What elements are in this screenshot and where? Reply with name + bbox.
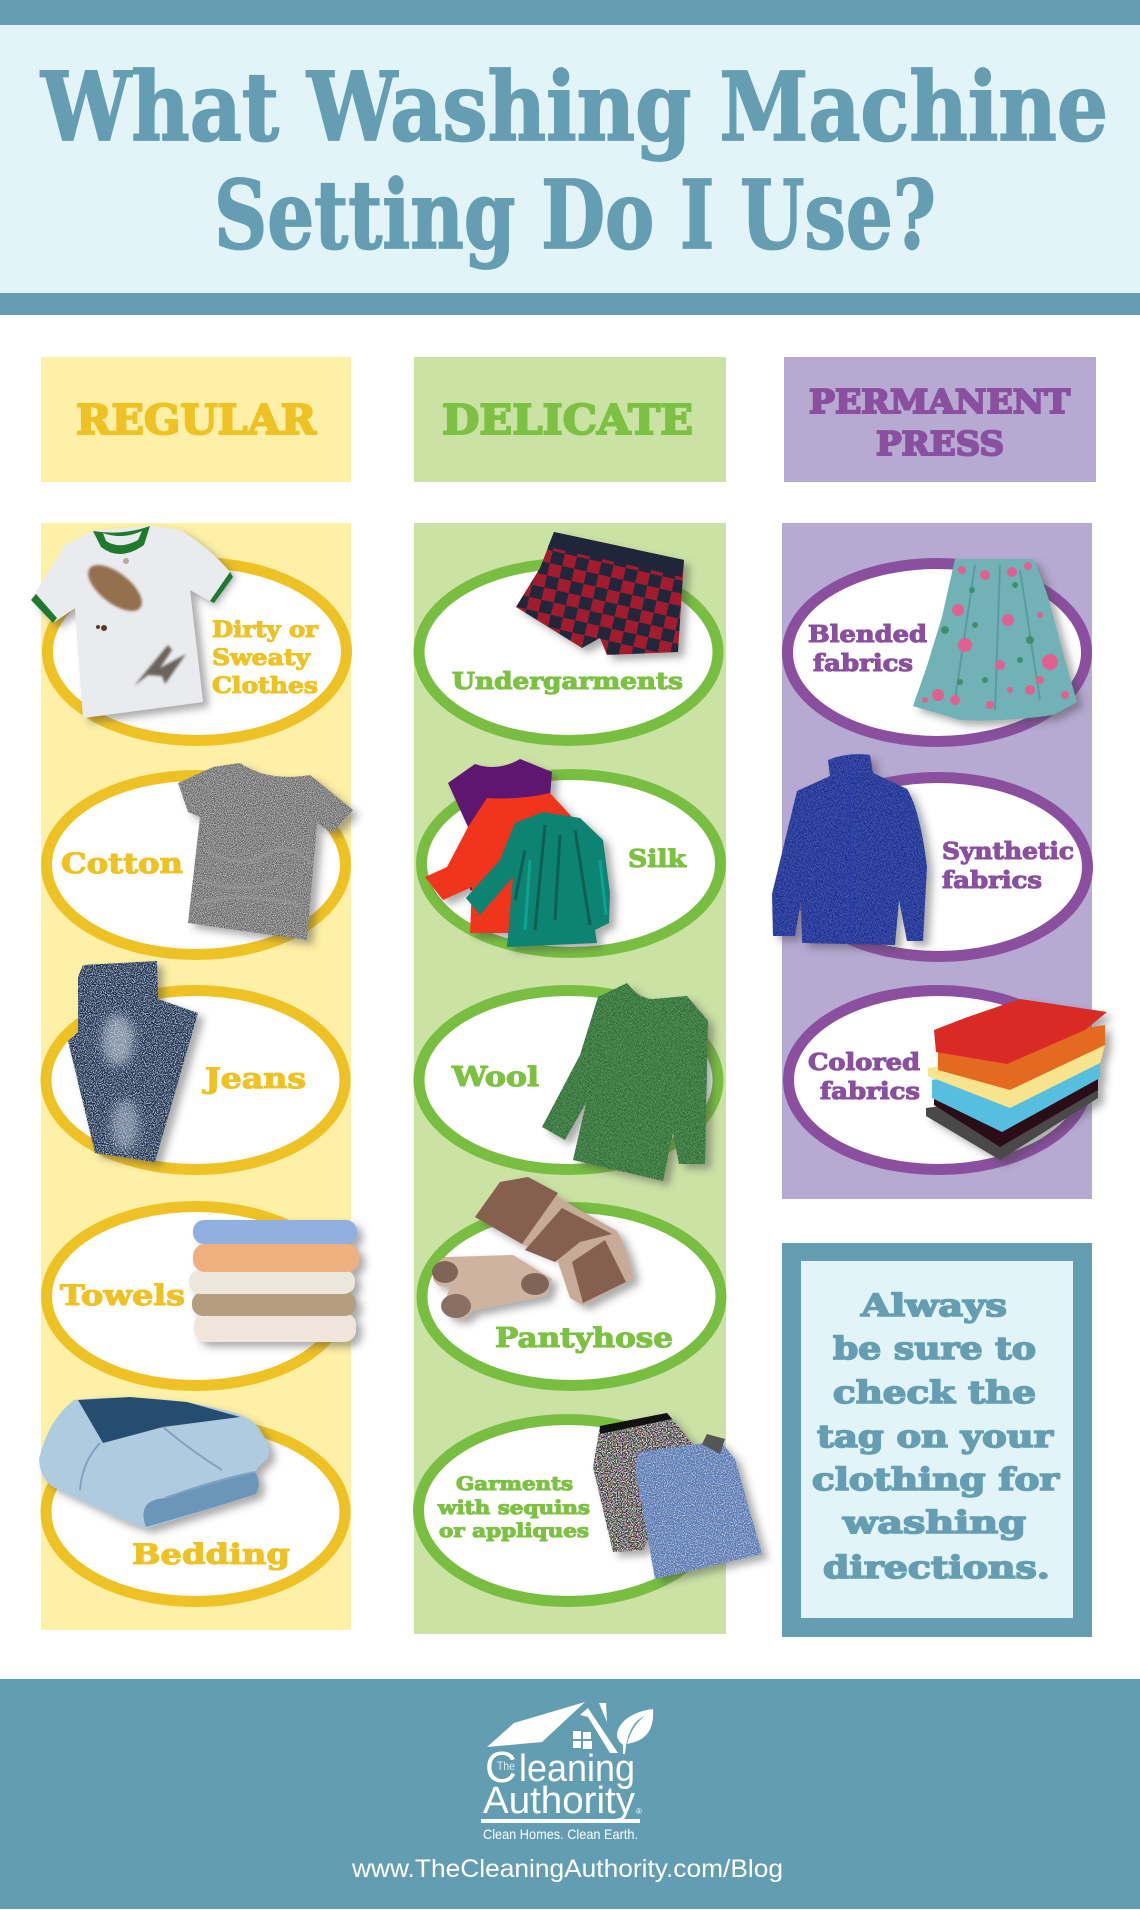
label: fabrics xyxy=(942,867,1042,894)
label: fabrics xyxy=(813,650,913,677)
label: Towels xyxy=(60,1279,185,1312)
icon: pantyhose xyxy=(432,1177,633,1319)
website url: www.TheCleaningAuthority.com/Blog xyxy=(351,1855,783,1883)
item: synthetic fabrics xyxy=(772,754,1088,956)
label: Synthetic xyxy=(942,838,1074,865)
logo: the cleaning authority xyxy=(481,1702,653,1842)
heading: permanent press xyxy=(784,357,1096,482)
heading: regular: REGULAR xyxy=(76,396,317,444)
icon: house and leaf xyxy=(487,1702,653,1754)
heading: permanent press: PERMANENT xyxy=(809,382,1070,421)
header banner xyxy=(0,0,1140,315)
item: wool xyxy=(419,983,718,1181)
label: Clothes xyxy=(212,673,318,699)
item: towels xyxy=(46,1206,359,1386)
item: blended fabrics xyxy=(788,559,1086,742)
label: Bedding xyxy=(132,1538,290,1571)
logo: the cleaning authority: The xyxy=(497,1759,515,1773)
label: Sweaty xyxy=(212,645,311,671)
label: or appliques xyxy=(439,1520,589,1542)
item: silk xyxy=(422,759,720,952)
label: Garments xyxy=(456,1473,573,1495)
title: Setting Do I Use? xyxy=(214,160,936,271)
icon: folded colored stack xyxy=(926,999,1107,1160)
icon: blue fleece jacket xyxy=(772,754,927,945)
heading: permanent press: PRESS xyxy=(876,424,1004,463)
item: pantyhose xyxy=(422,1177,721,1386)
panel: regular items xyxy=(31,523,359,1630)
label xyxy=(808,1049,920,1105)
logo: the cleaning authority: Clean Homes. Clean Earth. xyxy=(483,1826,638,1842)
icon: green sweater xyxy=(542,983,708,1181)
item: cotton xyxy=(46,763,353,954)
heading: delicate xyxy=(414,357,726,482)
icon: gray t-shirt xyxy=(178,763,353,940)
heading: delicate: DELICATE xyxy=(442,396,693,444)
logo: the cleaning authority: leaning xyxy=(519,1748,635,1790)
callout text: tag on your xyxy=(817,1419,1054,1455)
item: dirty or sweaty clothes xyxy=(31,526,346,740)
label xyxy=(212,617,318,699)
label: Undergarments xyxy=(452,668,683,695)
callout text: check the xyxy=(833,1375,1036,1411)
item: garments with sequins or appliques xyxy=(418,1413,762,1602)
callout: check the tag xyxy=(782,1243,1092,1637)
panel: delicate items xyxy=(414,523,762,1634)
label: Blended xyxy=(808,621,927,648)
logo: the cleaning authority: Authority xyxy=(483,1780,635,1822)
label: Jeans xyxy=(201,1062,306,1095)
title xyxy=(40,52,1108,271)
icon: jeans xyxy=(68,961,198,1162)
icon: silk blouses xyxy=(425,759,610,947)
item: bedding xyxy=(39,1397,345,1602)
panel: permanent press items xyxy=(772,523,1107,1199)
label: Cotton xyxy=(61,847,183,880)
icon: sequined skirts xyxy=(593,1413,762,1579)
icon: towel stack xyxy=(189,1220,359,1342)
item: colored fabrics xyxy=(788,990,1107,1170)
label xyxy=(808,621,927,677)
logo: the cleaning authority: C xyxy=(485,1743,517,1792)
label: Pantyhose xyxy=(495,1323,673,1354)
label: fabrics xyxy=(820,1078,920,1105)
label xyxy=(437,1473,590,1542)
icon: checkered boxers xyxy=(516,532,684,655)
label: Dirty or xyxy=(212,617,318,643)
callout text: directions. xyxy=(823,1550,1050,1586)
label: Colored xyxy=(808,1049,920,1076)
icon: dirty t-shirt xyxy=(31,526,233,718)
label: Wool xyxy=(451,1062,539,1093)
label: with sequins xyxy=(437,1497,590,1519)
callout text: Always xyxy=(860,1288,1007,1324)
label: Silk xyxy=(628,844,688,873)
item: undergarments xyxy=(419,532,718,740)
logo: the cleaning authority: ® xyxy=(636,1807,642,1816)
footer xyxy=(0,1679,1140,1909)
callout text: clothing for xyxy=(812,1462,1060,1498)
item: jeans xyxy=(46,961,345,1170)
callout text: washing xyxy=(842,1505,1026,1541)
icon: floral skirt xyxy=(913,559,1077,720)
icon: comforter xyxy=(39,1397,269,1528)
heading: regular xyxy=(41,357,351,482)
callout text xyxy=(812,1288,1060,1586)
label xyxy=(942,838,1074,894)
callout text: be sure to xyxy=(833,1331,1036,1367)
